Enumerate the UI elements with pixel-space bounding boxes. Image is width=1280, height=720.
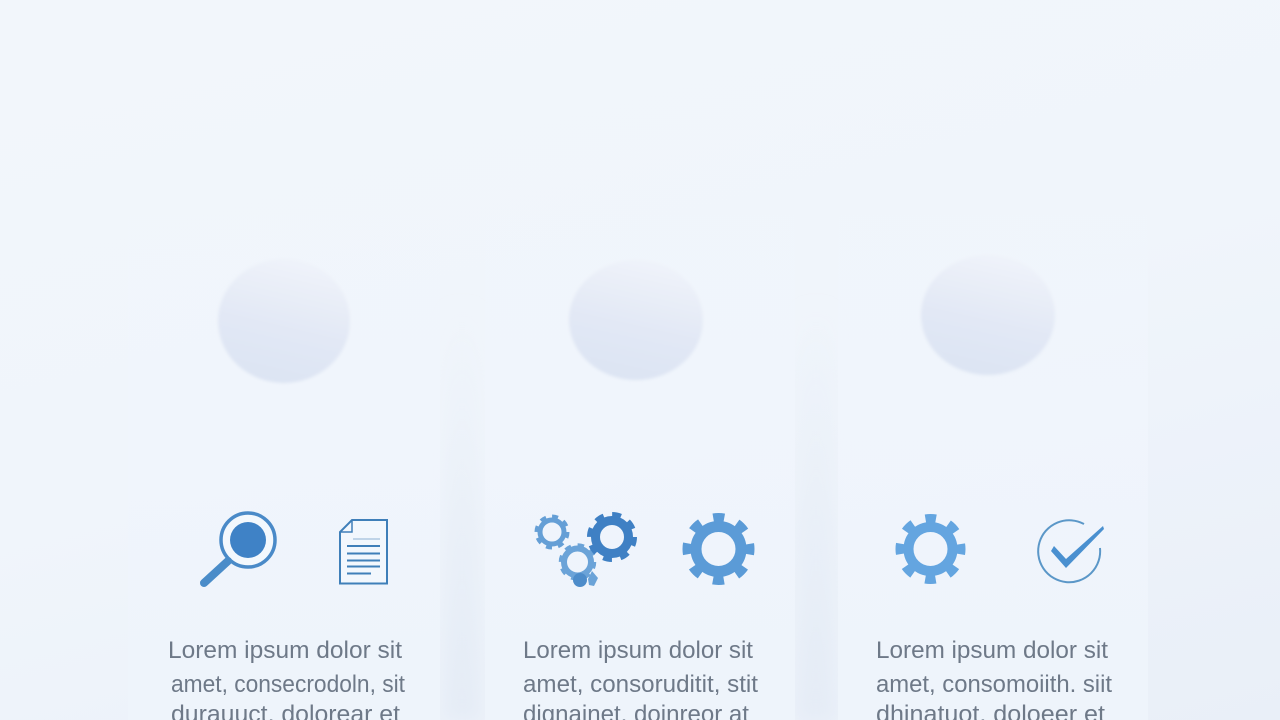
body text 3: Lorem ipsum dolor sit <box>876 637 1108 664</box>
panel: step 2 <box>485 215 795 720</box>
icon: gear cluster <box>536 514 634 587</box>
icon: document <box>340 520 387 584</box>
body text 2: amet, consoruditit, stit <box>523 671 758 698</box>
icon: check mark in circle <box>1038 520 1104 582</box>
body text 3: amet, consomoiith. siit <box>876 671 1112 698</box>
icon: circle placeholder 3 <box>921 255 1055 375</box>
body text 3 <box>876 637 1112 720</box>
panel 2 background <box>485 215 795 720</box>
icon: circle placeholder 1 <box>218 259 350 383</box>
icon: large gear <box>687 518 750 580</box>
icon: circle placeholder 2 <box>569 260 703 380</box>
panel: step 3 <box>838 215 1148 720</box>
panel: step 1 <box>128 215 440 720</box>
panel 3 background <box>838 215 1148 720</box>
icon: gear <box>900 518 961 580</box>
icon: magnifying glass <box>204 513 275 583</box>
shadow columns between panels <box>444 300 834 720</box>
body text 2 <box>523 637 758 720</box>
panel 1 background <box>128 215 440 720</box>
body text 2: Lorem ipsum dolor sit <box>523 637 753 664</box>
body text 1 <box>168 637 405 720</box>
body text 1: amet, consecrodoln, sit <box>171 671 405 698</box>
body text 1: Lorem ipsum dolor sit <box>168 637 402 664</box>
